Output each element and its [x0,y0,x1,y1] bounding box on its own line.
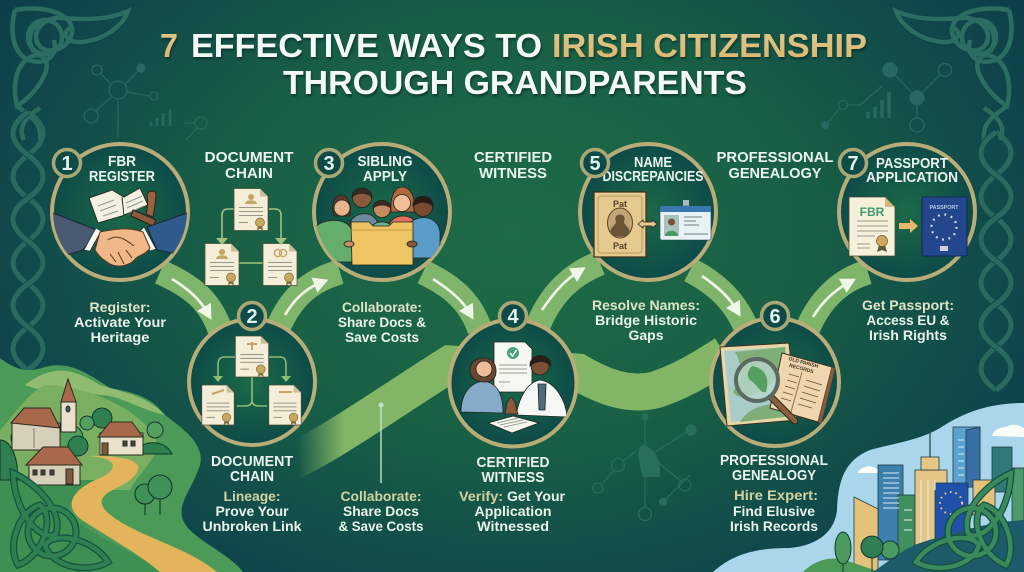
caption: step 7: Irish Rights [869,327,947,343]
church and village houses [11,379,143,485]
heading: professional genealogy (top) [716,149,834,182]
heading: certified witness (top): CERTIFIED [474,149,552,166]
icon: siblings holding folder [313,187,440,265]
badge: 3: 3 [323,153,335,175]
badge: 2 [238,302,266,330]
caption: step 5 [592,297,700,343]
caption: step 1 [74,299,167,345]
foreground trees [135,475,172,515]
heading: professional genealogy (top): GENEALOGY [728,165,822,182]
badge: 7: 7 [847,153,859,175]
pointer line [378,402,384,483]
panel: step 7 passport application [839,144,975,280]
caption: step 3: Share Docs & [338,314,426,330]
arrow: step 3 to 4 [423,272,480,330]
icon: old parchment record: Pat [613,199,627,209]
caption: step 6: Hire Expert: [734,487,818,503]
clouds [858,425,1024,473]
icon: parish records book [770,353,835,424]
caption: step 5: Resolve Names: [592,297,700,313]
heading: DISCREPANCIES [602,168,704,185]
panel: step 1 FBR register [45,144,195,280]
caption: collaborate note [338,488,424,534]
icon: magnifying glass [736,359,795,421]
caption: step 3: Collaborate: [342,299,422,315]
caption: step 2 [202,453,302,534]
heading: SIBLING [358,153,412,170]
caption: step 2: Prove Your [216,503,289,519]
documents [205,188,297,286]
caption: collaborate note: Collaborate: [340,488,422,504]
badge: 7 [840,150,866,176]
heading: certified witness (top) [474,149,552,182]
caption: step 4: CERTIFIED [476,454,550,471]
caption: step 6: PROFESSIONAL [720,452,828,469]
heading [358,153,412,185]
title: 7 [160,27,178,64]
icon: parish records book: OLD PARISH [788,356,819,370]
caption: step 3: Save Costs [345,329,419,345]
celtic knot bottom right [916,473,1011,568]
caption: step 5: Gaps [628,327,664,343]
title [160,27,867,101]
heading and diagram: document chain (top): DOCUMENT [204,149,294,166]
heading: professional genealogy (top): PROFESSIONAL [716,149,834,166]
caption: step 7 [862,297,954,343]
caption: step 6 [720,452,828,534]
caption: step 2: DOCUMENT [211,453,293,470]
caption: step 6: Find Elusive [733,503,815,519]
panel: step 5 name discrepancies [580,144,716,280]
caption: step 1: Activate Your [74,314,167,330]
celtic knot bottom left [13,473,108,568]
icon: FBR certificate: FBR [860,205,885,219]
badge: 5 [582,150,608,176]
heading and diagram: document chain (top) [204,149,297,286]
caption: step 7: Get Passport: [862,297,954,313]
heading: certified witness (top): WITNESS [479,165,547,182]
arrow: step 4 to 5 [537,263,600,328]
title: THROUGH GRANDPARENTS [283,64,747,101]
illustration: modern city skyline [713,403,1024,572]
caption: step 4 [459,454,566,534]
decoration: network lower centre [593,414,696,520]
heading: FBR [108,153,136,170]
heading: NAME [634,154,672,171]
heading and diagram: document chain (top): CHAIN [225,165,273,182]
winding road [72,456,217,572]
icon: ID card [660,200,711,240]
panel: step 6 professional genealogy [711,318,839,446]
folder [351,222,413,265]
caption: step 4: WITNESS [482,469,544,486]
connectors [218,357,286,406]
arrow: step 1 to 2 [160,272,220,330]
title: EFFECTIVE WAYS TO [191,27,542,64]
illustration: village landscape [0,358,243,572]
caption: step 4: Verify: [459,488,503,504]
icon: witness and doctor signing [461,342,567,433]
caption: step 3 [338,299,426,345]
heading: APPLICATION [866,169,958,186]
caption: step 4: Application [474,503,552,519]
caption: step 1: Register: [90,299,150,315]
decoration: network top left [84,64,207,140]
icon: arrow [899,219,918,233]
icon: register book and stamp [89,188,156,226]
decoration: right braid [981,132,1011,390]
caption: step 7: Access EU & [866,312,950,328]
caption: step 4: Get Your [507,488,566,504]
caption: step 1: Heritage [90,329,150,345]
trees behind the village [0,408,172,480]
decoration: left braid [13,112,43,370]
arrow: step 2 to 3 [278,272,340,328]
heading [602,154,704,185]
heading: REGISTER [89,168,155,185]
badge: 2: 2 [246,306,258,328]
badge: 1: 1 [61,153,73,175]
panel: step 3 sibling apply [313,144,450,280]
documents [202,336,301,425]
ribbon: long background wave [285,354,725,465]
caption: step 4: Witnessed [477,518,549,534]
icon: handshake [53,212,187,266]
decoration: network top right [822,63,952,132]
panel: step 4 certified witness [450,320,576,446]
caption: step 6: Irish Records [730,518,818,534]
caption: step 2: CHAIN [230,468,274,485]
decoration: celtic corner top left [13,9,128,140]
hill and trees [803,558,880,572]
caption: step 5: Bridge Historic [595,312,697,328]
badge: 4 [500,302,526,330]
icon: old parchment record [594,192,646,257]
badge: 6 [762,302,788,330]
arrow: step 5 to 6 [690,270,747,330]
connectors [222,209,281,263]
heading [89,153,155,185]
panel: step 2 document chain [189,319,315,445]
badge: 5: 5 [589,153,601,175]
caption: step 2: Lineage: [224,488,280,504]
icon: map [720,343,797,426]
caption: step 6: GENEALOGY [732,467,816,484]
heading: PASSPORT [876,155,948,172]
badge: 1 [54,150,80,176]
caption: collaborate note: & Save Costs [338,518,424,534]
title: IRISH CITIZENSHIP [552,27,867,64]
badge: 3 [316,150,342,176]
icon: EU passport: PASSPORT [930,205,958,211]
caption: step 2: Unbroken Link [202,518,302,534]
heading: APPLY [363,168,407,185]
decoration: celtic corner top right [896,9,1011,140]
badge: 6: 6 [769,306,781,328]
arrow: step 6 to 7 [808,272,868,328]
icon: double arrow [638,220,657,228]
icon: parish records book: RECORDS [788,363,815,375]
icon: old parchment record: Pat [613,241,627,251]
badge: 4: 4 [507,306,519,328]
caption: collaborate note: Share Docs [343,503,419,519]
buildings [854,427,1024,572]
heading [866,155,958,186]
